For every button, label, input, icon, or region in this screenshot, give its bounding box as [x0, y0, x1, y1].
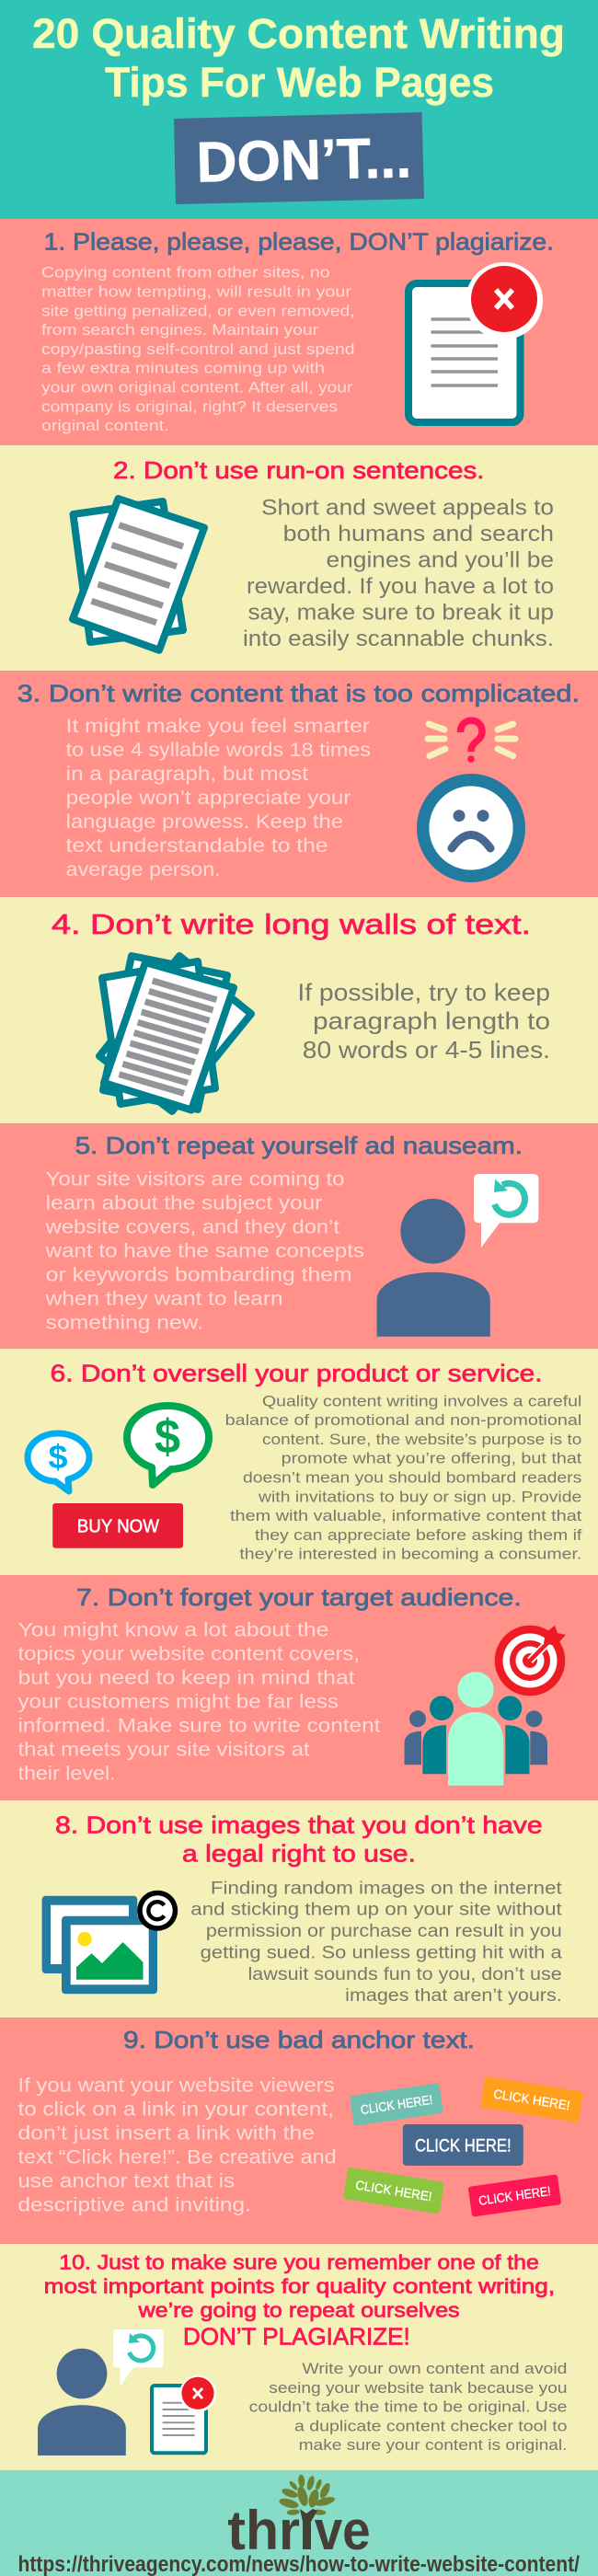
text block: tip 5: want to have the same concepts	[45, 1240, 364, 1261]
button: teal click here: CLICK HERE!	[360, 2092, 433, 2117]
icon: big stack of pages	[99, 956, 251, 1111]
panel: tip 2 run-on sentences	[0, 445, 598, 671]
text block: tip 5: something new.	[46, 1312, 203, 1333]
text block: tip 9: If you want your website viewers	[18, 2075, 335, 2096]
text block: tip 7: that meets your site visitors at	[18, 1739, 310, 1760]
text block: tip 8: lawsuit sounds fun to you, don’t use	[248, 1965, 562, 1984]
text block: tip 9	[18, 2075, 337, 2215]
text block: tip 4: If possible, try to keep	[297, 978, 550, 1006]
text block: tip 9: descriptive and inviting.	[18, 2194, 251, 2215]
heading: tip 7: 7. Don’t forget your target audience.	[76, 1583, 522, 1611]
text block: tip 3	[66, 716, 371, 880]
heading: tip 1: 1. Please, please, please, DON’T plagiarize.	[44, 228, 554, 256]
heading: tip 5: 5. Don’t repeat yourself ad nauseam.	[75, 1132, 523, 1159]
text block: tip 5	[45, 1168, 364, 1333]
text block: tip 8: permission or purchase can result in you	[206, 1922, 562, 1941]
panel: tip 9 anchor text	[0, 2018, 598, 2244]
text block: tip 2: rewarded. If you have a lot to	[247, 574, 554, 599]
text block: tip 4: paragraph length to	[313, 1007, 550, 1035]
icon: document with red x	[152, 2375, 216, 2453]
button: orange click here	[480, 2076, 583, 2122]
text block: tip 3: to use 4 syllable words 18 times	[66, 740, 371, 761]
heading: tip 3: 3. Don’t write content that is too complicated.	[17, 679, 580, 707]
text block: tip 10: couldn’t take the time to be original. Use	[249, 2398, 567, 2416]
heading: tip 8: a legal right to use.	[182, 1839, 416, 1867]
text block: tip 3: people won’t appreciate your	[66, 788, 351, 809]
text block: tip 8: Finding random images on the internet	[211, 1879, 563, 1898]
text block: tip 4: 80 words or 4-5 lines.	[303, 1036, 550, 1064]
text block: tip 7: topics your website content covers,	[18, 1643, 360, 1664]
text block: tip 9: use anchor text that is	[18, 2170, 235, 2191]
text block: tip 10: seeing your website tank because you	[269, 2379, 567, 2397]
text block: tip 1: your own original content. After all, your	[41, 379, 353, 396]
panel: tip 1 plagiarize	[0, 219, 598, 445]
heading: tip 8: 8. Don’t use images that you don’t have	[55, 1811, 543, 1838]
text block: tip 5: Your site visitors are coming to	[46, 1168, 344, 1190]
text block: tip 5: website covers, and they don’t	[45, 1216, 339, 1237]
text block: tip 1: a few extra minutes coming up with	[41, 360, 325, 377]
icon: person with repeat bubble	[38, 2329, 163, 2455]
icon: green dollar bubble	[127, 1406, 209, 1485]
heading: tip 10: DON’T PLAGIARIZE!	[183, 2322, 410, 2350]
logo: thrive: thr	[227, 2500, 300, 2561]
icon: person with repeat bubble	[377, 1174, 538, 1337]
panel: tip 3 too complicated	[0, 671, 598, 897]
text block: tip 1: original content.	[41, 417, 169, 434]
heading: tip 10: we’re going to repeat ourselves	[137, 2299, 460, 2322]
button: pink click here: CLICK HERE!	[477, 2183, 552, 2208]
text block: tip 6	[225, 1392, 582, 1563]
text block: tip 1	[41, 264, 355, 434]
text block: tip 6: doesn’t mean you should bombard readers	[243, 1468, 581, 1487]
button: buy now	[52, 1503, 183, 1548]
text block: tip 3: language prowess. Keep the	[66, 811, 343, 833]
heading: tip 10: most important points for quality content writing,	[44, 2275, 555, 2298]
button: green click here: CLICK HERE!	[354, 2178, 433, 2203]
text block: tip 7: informed. Make sure to write content	[18, 1715, 381, 1736]
panel: tip 10 don't plagiarize	[0, 2244, 598, 2470]
icon: sad face	[417, 774, 525, 882]
banner: DON'T	[174, 112, 424, 204]
text block: tip 6: them with valuable, informative content that	[230, 1507, 582, 1524]
text block: tip 7: but you need to keep in mind that	[18, 1667, 355, 1688]
text block: tip 10	[249, 2360, 567, 2454]
heading: tip 10: 10. Just to make sure you remember one of the	[59, 2251, 539, 2274]
text block: tip 10: a duplicate content checker tool to	[294, 2417, 567, 2434]
icon: document with red x	[408, 262, 543, 422]
text block: tip 6: Quality content writing involves a careful	[262, 1392, 581, 1409]
text block: tip 8	[190, 1879, 563, 2006]
text block: tip 7: your customers might be far less	[18, 1691, 339, 1712]
text block: tip 1: copy/pasting self-control and just spend	[41, 340, 355, 358]
panel: header	[0, 0, 598, 219]
text block: tip 2: both humans and search	[283, 522, 554, 546]
text block: tip 6: content. Sure, the website’s purpose is to	[262, 1431, 581, 1448]
title: Tips For Web Pages	[105, 59, 494, 106]
text block: tip 6: they can appreciate before asking them if	[255, 1526, 582, 1544]
icon: audience group	[405, 1672, 547, 1786]
panel: tip 5 repeat yourself	[0, 1123, 598, 1349]
text block: tip 1: from search engines. Maintain your	[41, 321, 318, 339]
panel: tip 8 image rights	[0, 1800, 598, 2018]
text block: tip 2: say, make sure to break it up	[248, 601, 554, 626]
button: buy now: BUY NOW	[77, 1517, 159, 1537]
heading: tip 9: 9. Don’t use bad anchor text.	[123, 2026, 475, 2053]
text block: tip 2: engines and you’ll be	[326, 548, 554, 573]
text block: tip 6: they’re interested in becoming a consumer.	[239, 1546, 581, 1563]
text block: tip 3: text understandable to the	[66, 835, 328, 857]
banner: DON'T: DON’T...	[196, 126, 412, 195]
icon: stacked pages	[73, 499, 204, 650]
button: green click here	[343, 2167, 444, 2214]
text block: tip 6: promote what you’re offering, but that	[282, 1450, 582, 1467]
heading: tip 8	[55, 1811, 543, 1867]
text block: tip 5: when they want to learn	[45, 1288, 283, 1309]
icon: blue dollar bubble	[28, 1433, 89, 1491]
text block: tip 7	[18, 1619, 381, 1784]
heading: tip 2: 2. Don’t use run-on sentences.	[113, 456, 484, 484]
button: navy click here: CLICK HERE!	[415, 2136, 512, 2156]
text block: tip 2	[243, 495, 554, 651]
text block: tip 6: balance of promotional and non-promotional	[225, 1411, 581, 1429]
text block: tip 2: Short and sweet appeals to	[261, 495, 554, 520]
button: navy click here	[403, 2124, 523, 2166]
text block: tip 10: make sure your content is original.	[299, 2436, 567, 2454]
icon: blue dollar bubble: $	[48, 1438, 68, 1476]
title: 20 Quality Content Writing	[32, 10, 565, 57]
icon: target with arrow	[495, 1626, 566, 1696]
icon: copyrighted images	[42, 1891, 178, 1994]
panel: tip 6 oversell	[0, 1349, 598, 1575]
text block: tip 7: You might know a lot about the	[18, 1619, 328, 1640]
text block: tip 3: average person.	[66, 859, 221, 880]
text block: tip 1: company is original, right? It deserves	[41, 397, 338, 415]
text block: tip 2: into easily scannable chunks.	[243, 627, 554, 651]
text block: tip 9: text “Click here!”. Be creative and	[18, 2146, 337, 2168]
text block: tip 7: their level.	[18, 1763, 116, 1784]
text block: tip 5: learn about the subject your	[46, 1192, 322, 1213]
panel: tip 7 target audience	[0, 1575, 598, 1800]
text block: tip 5: or keywords bombarding them	[46, 1264, 352, 1285]
panel: footer	[0, 2470, 598, 2576]
heading: tip 10	[44, 2251, 555, 2350]
text block: tip 10: Write your own content and avoid	[302, 2360, 567, 2377]
button: orange click here: CLICK HERE!	[492, 2087, 571, 2112]
icon: green dollar bubble: $	[155, 1410, 180, 1464]
text block: tip 8: images that aren’t yours.	[345, 1986, 562, 2006]
logo: thrive	[227, 2474, 371, 2561]
button: pink click here	[468, 2174, 561, 2217]
text block: tip 3: in a paragraph, but most	[66, 764, 308, 785]
text block: tip 9: to click on a link in your content,	[18, 2099, 334, 2120]
text block: tip 9: don’t just insert a link with the	[18, 2122, 315, 2144]
text block: tip 8: getting sued. So unless getting hit with a	[201, 1943, 562, 1963]
text block: tip 3: It might make you feel smarter	[66, 716, 370, 737]
heading: tip 6: 6. Don’t oversell your product or service.	[51, 1360, 543, 1387]
logo: thrive: ve	[315, 2500, 371, 2561]
title	[32, 10, 565, 106]
heading: tip 4: 4. Don’t write long walls of text.	[52, 908, 531, 940]
panel: tip 4 walls of text	[0, 897, 598, 1123]
text block: tip 1: matter how tempting, will result in your	[41, 283, 351, 300]
button: teal click here	[350, 2083, 443, 2126]
text block: tip 4	[297, 978, 550, 1064]
text block: tip 6: with invitations to buy or sign up. Provide	[258, 1488, 581, 1505]
text block: tip 8: and sticking them up on your site without	[190, 1901, 563, 1920]
text block: tip 1: site getting penalized, or even removed,	[41, 302, 355, 319]
icon: question mark with rays	[428, 720, 515, 763]
text block: tip 1: Copying content from other sites, no	[41, 264, 330, 282]
